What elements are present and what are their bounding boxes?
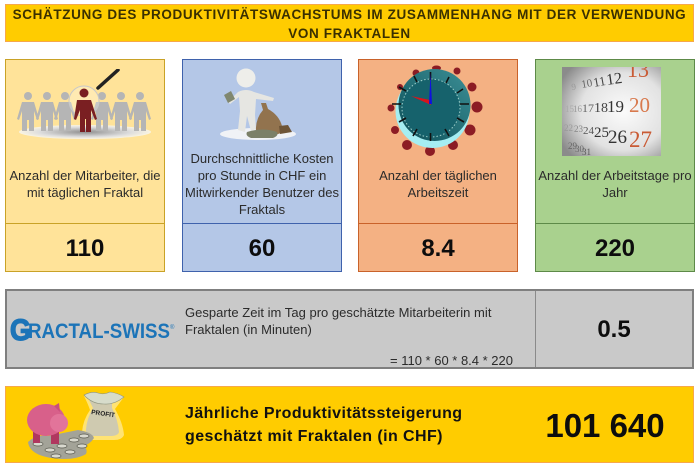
label: Mitwirkender Benutzer des — [185, 185, 339, 200]
icon: calendar photo: 12 — [605, 70, 623, 89]
logo: Fractal-Swiss — [10, 314, 175, 347]
icon: piggy bank and profit bag: PROFIT — [91, 409, 115, 419]
label — [379, 168, 497, 200]
icon: clock — [388, 66, 482, 156]
icon: calendar photo: 22 — [564, 123, 573, 133]
icon: calendar photo: 10 — [580, 77, 594, 91]
icon: calendar photo: 20 — [629, 93, 650, 117]
icon: calendar photo: 9 — [571, 81, 577, 92]
panel: jährliche Produktivitätssteigerung — [5, 386, 694, 463]
icon: calendar photo: 29 — [568, 141, 578, 151]
panel: Arbeitszeit — [358, 59, 518, 272]
formula: = 110 * 60 * 8.4 * 220 — [390, 353, 513, 368]
description: Fraktalen (in Minuten) — [185, 322, 312, 337]
icon: figure with money bag — [220, 68, 296, 140]
icon: calendar photo — [562, 67, 661, 156]
panel: gesparte Zeit — [5, 289, 694, 369]
label: geschätzt mit Fraktalen (in CHF) — [185, 428, 443, 445]
title banner — [5, 4, 694, 42]
label: Jahr — [602, 185, 628, 200]
label — [185, 405, 462, 445]
value: 60 — [249, 235, 275, 262]
value: 110 — [66, 235, 104, 262]
label: Anzahl der Mitarbeiter, die — [9, 168, 161, 183]
label — [185, 151, 339, 217]
icon: calendar photo: 16 — [573, 104, 582, 114]
logo: Fractal-Swiss: ® — [170, 324, 175, 331]
icon: calendar photo: 24 — [583, 125, 594, 137]
title banner: SCHÄTZUNG DES PRODUKTIVITÄTSWACHSTUMS IM ZUSAMMENHANG MIT DER VERWENDUNG — [13, 7, 686, 22]
description: Gesparte Zeit im Tag pro geschätzte Mitarbeiterin mit — [185, 305, 491, 320]
label: Jährliche Produktivitätssteigerung — [185, 405, 462, 422]
label — [538, 168, 692, 200]
panel: Arbeitstage — [535, 59, 695, 272]
label: Anzahl der täglichen — [379, 168, 497, 183]
title banner: VON FRAKTALEN — [288, 26, 411, 41]
description — [185, 305, 492, 337]
icon: calendar photo: 18 — [594, 101, 608, 116]
label: Fraktals — [239, 202, 285, 217]
icon: people with magnifier — [17, 69, 151, 139]
icon: calendar photo: 17 — [582, 101, 594, 115]
icon: calendar photo: 30 — [575, 144, 584, 154]
label: Arbeitszeit — [408, 185, 468, 200]
icon: calendar photo: 25 — [594, 125, 609, 141]
label: Durchschnittliche Kosten — [190, 151, 334, 166]
value: 220 — [595, 235, 635, 262]
icon: calendar photo: 26 — [608, 127, 627, 148]
value: 101 640 — [545, 407, 665, 444]
panel: Anzahl der Mitarbeiter — [5, 59, 165, 272]
label — [9, 168, 161, 200]
value: 8.4 — [421, 235, 455, 262]
label: pro Stunde in CHF ein — [198, 168, 326, 183]
icon: piggy bank and profit bag — [27, 392, 124, 459]
icon: calendar photo: 11 — [592, 73, 607, 90]
icon: calendar photo: 19 — [607, 97, 624, 116]
value: 0.5 — [597, 316, 631, 343]
logo: Fractal-Swiss: G — [10, 314, 31, 347]
icon: calendar photo: 27 — [629, 127, 652, 152]
label: mit täglichen Fraktal — [27, 185, 143, 200]
icon: calendar photo: 15 — [565, 104, 574, 114]
panel: Durchschnittliche Kosten — [182, 59, 342, 272]
label: Anzahl der Arbeitstage pro — [538, 168, 692, 183]
icon: calendar photo: 23 — [574, 124, 584, 134]
